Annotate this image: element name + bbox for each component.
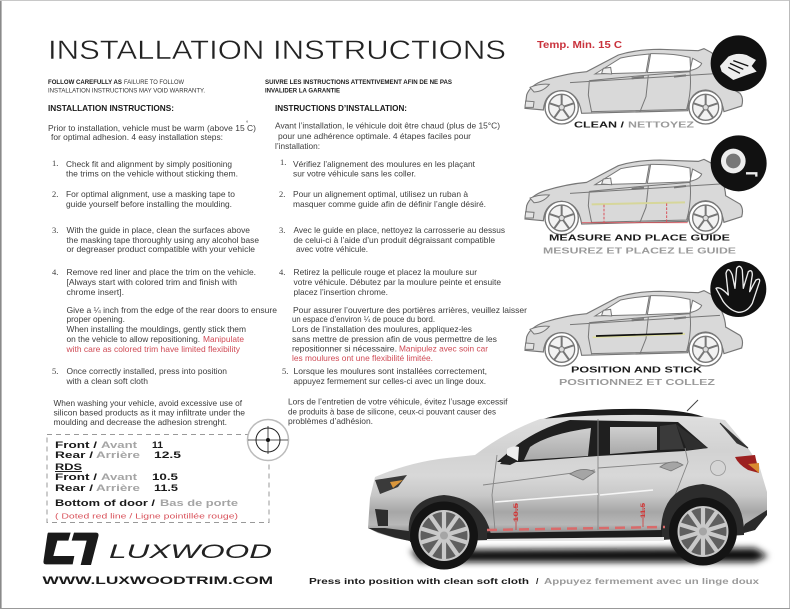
measurements box: Avant	[101, 472, 137, 482]
main photo: SUV side view	[368, 400, 768, 570]
english instructions: 4.	[52, 267, 58, 277]
french instructions: 5.	[282, 366, 288, 376]
french instructions: Lors de l’installation des moulures, appliquez-les	[292, 324, 472, 334]
english instructions: 1.	[52, 158, 58, 168]
french instructions: votre véhicule. Débutez par la moulure peinte et ensuite	[294, 277, 501, 287]
english instructions: Check fit and alignment by simply positioning	[66, 159, 232, 169]
caption: stick: POSITIONNEZ ET COLLEZ	[559, 377, 715, 387]
english instructions: Once correctly installed, press into position	[66, 366, 227, 376]
english instructions: For optimal alignment, use a masking tape to	[66, 189, 235, 199]
french instructions: 2.	[279, 189, 285, 199]
french instructions: Pour assurer l’ouverture des portières arrières, veuillez laisser	[293, 305, 527, 315]
french instructions: placez l’insertion chrome.	[294, 287, 388, 297]
french instructions: Retirez la pellicule rouge et placez la moulure sur	[294, 267, 477, 277]
french instructions: problèmes d’adhésion.	[288, 416, 373, 426]
footer caption	[309, 576, 759, 586]
french instructions: pour une adhérence optimale. 4 étapes faciles pour	[278, 131, 471, 141]
french instructions: sans mettre de pression afin de vous permettre de les	[292, 334, 497, 344]
french instructions: masquer comme guide afin de définir l’angle désiré.	[293, 199, 486, 209]
icon: cleaning hand	[711, 35, 767, 91]
french instructions: Manipulez avec soin car	[399, 344, 488, 354]
main photo: SUV side view: 10.5	[514, 502, 520, 522]
measurements box: 12.5	[154, 450, 181, 460]
french instructions	[275, 103, 527, 426]
french instructions: Vérifiez l’alignement des moulures en les plaçant	[293, 159, 476, 169]
measurements box: Arrière	[96, 450, 140, 460]
english instructions: Prior to installation, vehicle must be warm (above 15 C)	[48, 123, 256, 133]
measurements box: Avant	[101, 440, 137, 450]
title: INSTALLATION INSTRUCTIONS	[48, 35, 506, 65]
warning english: FAILURE TO FOLLOW	[124, 80, 184, 86]
measurements box	[47, 434, 269, 522]
measurements box: Rear /	[55, 450, 94, 460]
english instructions: the masking tape thoroughly using any alcohol base	[66, 235, 259, 245]
english instructions: 3.	[52, 225, 58, 235]
caption: measure: MEASURE AND PLACE GUIDE	[549, 232, 730, 242]
english instructions: chrome insert].	[66, 287, 124, 297]
measurements box: ( Doted red line / Ligne pointillée rouge)	[55, 514, 238, 520]
french instructions: 4.	[279, 267, 285, 277]
logo: Luxwood: LUXWOOD	[109, 541, 272, 563]
website url: WWW.LUXWOODTRIM.COM	[42, 575, 273, 587]
english instructions: proper opening.	[66, 314, 125, 324]
french instructions: 1.	[280, 157, 286, 167]
english instructions: on the vehicle to allow repositioning.	[66, 334, 200, 344]
icon: measuring tape	[711, 135, 767, 191]
caption: measure	[543, 232, 736, 256]
english instructions: guide yourself before installing the moulding.	[66, 199, 232, 209]
french instructions: Lorsque les moulures sont installées correctement,	[294, 366, 487, 376]
step 3: stick car	[525, 291, 743, 366]
caption: stick	[559, 364, 715, 387]
english instructions: or degreaser product compatible with your vehicle	[66, 244, 255, 254]
english instructions: When installing the mouldings, gently stick them	[66, 324, 246, 334]
french instructions: 3.	[279, 225, 285, 235]
logo: Luxwood	[43, 533, 272, 565]
measurements box: 11	[152, 440, 163, 450]
english instructions: Give a ¼ inch from the edge of the rear doors to ensure	[66, 305, 277, 315]
footer caption: /	[536, 576, 539, 586]
french instructions: Avec le guide en place, nettoyez la carrosserie au dessus	[294, 225, 505, 235]
english instructions: for optimal adhesion. 4 easy installation steps:	[51, 132, 223, 142]
french instructions: repositionner si nécessaire.	[292, 344, 397, 354]
footer caption: Appuyez fermement avec un linge doux	[544, 576, 759, 586]
english instructions: the trims on the vehicle without sticking them.	[66, 168, 238, 178]
caption: clean: CLEAN /	[574, 120, 625, 130]
measurements box: Front /	[55, 440, 98, 450]
icon: hand	[710, 261, 766, 317]
warning english: FOLLOW CAREFULLY AS	[48, 80, 122, 86]
warning english: INSTALLATION INSTRUCTIONS MAY VOID WARRANTY.	[48, 88, 205, 94]
measurements box: RDS	[55, 462, 82, 472]
caption: clean: NETTOYEZ	[628, 120, 694, 130]
warning french	[265, 80, 452, 94]
french instructions: un espace d’environ ¼ de pouce du bord.	[292, 314, 435, 324]
french instructions: sur votre véhicule sans les coller.	[293, 168, 416, 178]
measurements box: 10.5	[152, 472, 178, 482]
french instructions: de celui-ci à l’aide d’un produit dégraissant compatible	[294, 235, 495, 245]
french instructions: avec votre véhicule.	[296, 244, 368, 254]
step 1: clean car	[525, 49, 743, 124]
english instructions: INSTALLATION INSTRUCTIONS:	[48, 103, 174, 113]
measurements box: Front /	[55, 472, 98, 482]
icon: target	[248, 420, 288, 460]
measurements box: Bas de porte	[160, 498, 238, 508]
english instructions: 2.	[52, 189, 58, 199]
caption: stick: POSITION AND STICK	[571, 364, 703, 374]
caption: measure: MESUREZ ET PLACEZ LE GUIDE	[543, 246, 736, 256]
english instructions: 5.	[52, 366, 58, 376]
french instructions: Avant l’installation, le véhicule doit être chaud (plus de 15°C)	[275, 120, 500, 130]
measurements box: Arrière	[96, 483, 140, 493]
english instructions: [Always start with colored trim and finish with	[66, 277, 237, 287]
english instructions: When washing your vehicle, avoid excessive use of	[54, 398, 243, 408]
warning english	[48, 80, 205, 94]
english instructions: Manipulate	[203, 334, 244, 344]
english instructions: silicon based products as it may infiltrate under the	[54, 408, 245, 418]
french instructions: les moulures ont une flexibilité limitée.	[292, 353, 433, 363]
french instructions: Lors de l’entretien de votre véhicule, évitez l’usage excessif	[288, 396, 508, 406]
main photo: SUV side view: 11.5	[641, 502, 647, 518]
french instructions: Pour un alignement optimal, utilisez un ruban à	[293, 189, 468, 199]
caption: clean	[574, 120, 694, 130]
warning french: SUIVRE LES INSTRUCTIONS ATTENTIVEMENT AFIN DE NE PAS	[265, 80, 452, 86]
french instructions: de produits à base de silicone, ceux-ci pouvant causer des	[288, 406, 496, 416]
warning french: INVALIDER LA GARANTIE	[265, 88, 340, 94]
english instructions: With the guide in place, clean the surfaces above	[66, 225, 250, 235]
english instructions: °	[246, 121, 249, 127]
french instructions: appuyez fermement sur celles-ci avec un linge doux.	[294, 376, 486, 386]
english instructions: with care as colored trim have limited flexibility	[65, 344, 241, 354]
english instructions: Remove red liner and place the trim on the vehicle.	[66, 267, 256, 277]
french instructions: INSTRUCTIONS D’INSTALLATION:	[275, 103, 407, 113]
english instructions: with a clean soft cloth	[65, 376, 148, 386]
temperature note: Temp. Min. 15 C	[537, 39, 622, 51]
footer caption: Press into position with clean soft cloth	[309, 576, 529, 586]
measurements box: Rear /	[55, 483, 94, 493]
measurements box: Bottom of door /	[55, 498, 156, 508]
english instructions: moulding and decrease the adhesion strenght.	[54, 417, 227, 427]
measurements box: 11.5	[154, 483, 178, 493]
english instructions	[48, 103, 277, 427]
french instructions: l’installation:	[275, 141, 320, 151]
step 2: measure car	[525, 159, 743, 235]
